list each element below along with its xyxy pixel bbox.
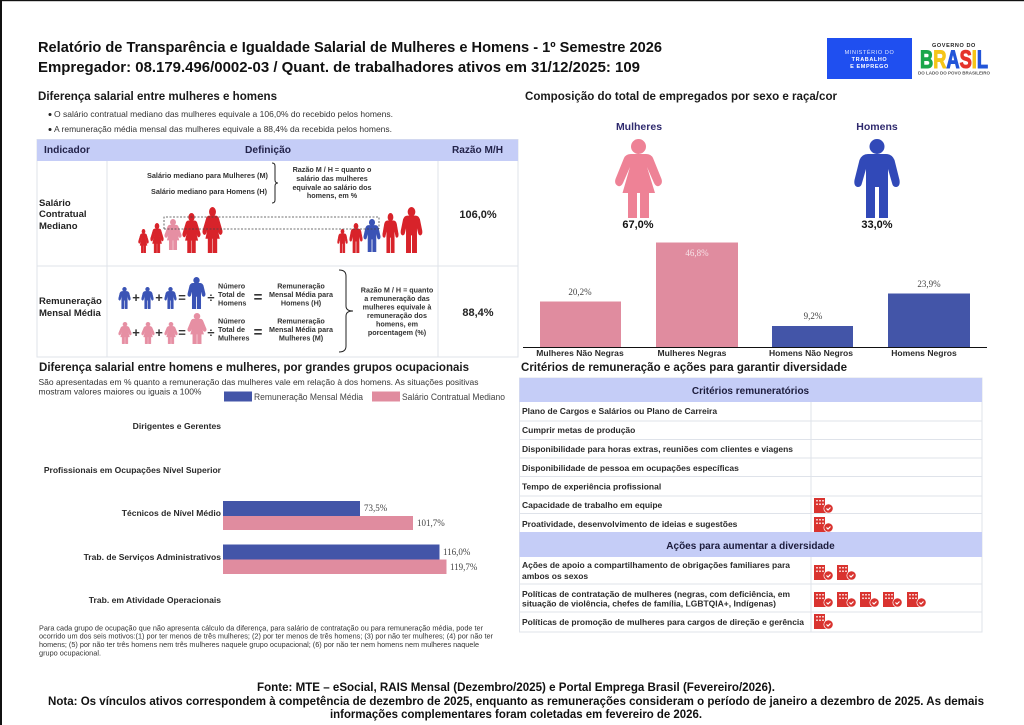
criteria list: Disponibilidade para horas extras, reuniões com clientes e viagens [522, 444, 793, 454]
formula: homens: = [178, 290, 186, 305]
formula: mulheres: = [178, 325, 186, 340]
icon: mulheres 67,0%: 67,0% [622, 219, 654, 231]
formula: homens: Remuneração [277, 282, 325, 290]
bar chart: grupos ocupacionais: 101,7% [417, 518, 445, 528]
bar chart: grupos ocupacionais: Trab. em Atividade Operacionais [89, 595, 221, 605]
legend: Salário Contratual Mediano [402, 392, 505, 402]
criteria list: Proatividade, desenvolvimento de ideias e sugestões [522, 519, 738, 529]
text: descrição do gráfico: São apresentadas em % quanto a remuneração das mulheres vale em relação à dos homens. As situações positivas [38, 377, 478, 387]
table header: Definição [245, 144, 291, 156]
bar chart: composição por sexo e raça: Homens Negros [891, 348, 957, 358]
logo: Ministério do Trabalho e Emprego: MINISTÉRIO DO [845, 49, 894, 56]
title: Empregador: 08.179.496/0002-03 / Quant. de trabalhadores ativos em 31/12/2025: 109 [38, 60, 640, 76]
row label: salário contratual mediano: Salário [39, 198, 71, 209]
icons: mulheres ordenadas por salário [138, 208, 222, 253]
heading: composição: Composição do total de empregados por sexo e raça/cor [525, 90, 837, 103]
formula: homens: Homens (H) [281, 298, 322, 308]
formula: mulheres: = [254, 324, 263, 341]
panel: critérios e ações [520, 378, 982, 632]
heading: diferença salarial: Diferença salarial entre mulheres e homens [38, 90, 277, 103]
row definition: salário mediano: salário das mulheres [296, 174, 368, 183]
icon: homens 33,0%: Homens [856, 121, 898, 133]
logo: Ministério do Trabalho e Emprego: E EMPREGO [850, 64, 889, 70]
bar chart: grupos ocupacionais: Trab. de Serviços Administrativos [84, 552, 221, 562]
title: Relatório de Transparência e Igualdade Salarial de Mulheres e Homens - 1º Semestre 2026 [38, 40, 662, 56]
row label: remuneração mensal média [39, 296, 102, 319]
brace and explanation: remuneração: Razão M / H = quanto [361, 286, 434, 294]
actions list [522, 560, 804, 627]
bullet list: resumo [48, 109, 393, 134]
bar chart: grupos ocupacionais: Profissionais em Ocupações Nível Superior [44, 465, 222, 475]
formula: mulheres: Remuneração [277, 316, 325, 326]
icons: ações adotadas [814, 565, 926, 630]
row definition: salário mediano: Salário mediano para Homens (H) [151, 187, 268, 196]
brace and explanation: remuneração: a remuneração das [364, 294, 430, 303]
actions list: Políticas de promoção de mulheres para cargos de direção e gerência [522, 617, 804, 627]
row definition: salário mediano: equivale ao salário dos [292, 183, 372, 192]
table header [44, 144, 503, 156]
bar chart: composição por sexo e raça: 46,8% [685, 248, 709, 258]
actions list: Ações de apoio a compartilhamento de obrigações familiares para [522, 560, 790, 570]
bar chart: grupos ocupacionais: 119,7% [450, 562, 478, 572]
table header: ações [520, 532, 982, 557]
formula: homens [119, 277, 334, 309]
logo: Governo do Brasil: DO LADO DO POVO BRASILEIRO [918, 70, 990, 76]
row definition: salário mediano [147, 163, 372, 203]
formula: homens: Homens [218, 298, 246, 308]
formula: mulheres: Número [218, 316, 246, 326]
table header: critérios remuneratórios: Critérios remuneratórios [692, 386, 810, 397]
text: descrição do gráfico: mostram valores maiores ou iguais a 100% [38, 386, 202, 396]
logo: Ministério do Trabalho e Emprego: TRABALHO [852, 57, 887, 63]
bar chart: composição por sexo e raça: 9,2% [804, 311, 823, 321]
formula: homens: = [254, 289, 263, 306]
icons: homens ordenados por salário [338, 208, 422, 253]
heading: critérios: Critérios de remuneração e ações para garantir diversidade [521, 361, 848, 374]
row definition: salário mediano: homens, em % [307, 191, 358, 200]
criteria list: Disponibilidade de pessoa em ocupações específicas [522, 463, 739, 473]
logo: Ministério do Trabalho e Emprego [827, 38, 912, 79]
actions list: Políticas de contratação de mulheres (negras, com deficiência, em [522, 589, 790, 599]
bar chart: composição por sexo e raça [523, 242, 987, 358]
icon: mulheres 67,0% [615, 121, 662, 231]
title [38, 40, 662, 76]
formula: mulheres: Mulheres [218, 334, 250, 342]
text: nota de rodapé do gráfico: grupo ocupacional. [39, 650, 101, 658]
bullet list: resumo: O salário contratual mediano das mulheres equivale a 106,0% do recebido pelos homens. [54, 109, 393, 119]
bar chart: composição por sexo e raça: Homens Não Negros [769, 348, 853, 358]
table header: ações: Ações para aumentar a diversidade [666, 541, 835, 552]
bar chart: grupos ocupacionais: Dirigentes e Gerentes [133, 421, 221, 431]
value: salário contratual mediano: 106,0% [459, 209, 497, 221]
criteria list: Plano de Cargos e Salários ou Plano de Carreira [522, 406, 717, 416]
logo: Governo do Brasil: GOVERNO DO [932, 43, 976, 49]
bar chart: composição por sexo e raça: 23,9% [917, 279, 941, 289]
formula: mulheres: ÷ [207, 325, 215, 340]
table header: Razão M/H [452, 144, 503, 156]
footer: fonte e nota: Fonte: MTE – eSocial, RAIS Mensal (Dezembro/2025) e Portal Emprega Brasil (Fevereiro/2026). [257, 680, 775, 694]
legend [224, 392, 505, 402]
row definition: salário mediano: Salário mediano para Mulheres (M) [147, 171, 269, 180]
criteria list: Cumprir metas de produção [522, 425, 635, 435]
row label: remuneração mensal média: Mensal Média [39, 308, 101, 319]
table header: critérios remuneratórios [520, 378, 982, 402]
bar chart: grupos ocupacionais: 73,5% [364, 503, 388, 513]
text: nota de rodapé do gráfico: Para cada grupo de ocupação que não apresenta cálculo da diferença, para salário de contratação ou para remuneração média, pode ter [39, 626, 484, 632]
formula: mulheres [119, 313, 334, 344]
formula: homens: + [155, 290, 163, 305]
brace and explanation: remuneração: porcentagem (%) [368, 328, 427, 337]
text: descrição do gráfico [38, 377, 478, 396]
formula: homens: ÷ [207, 290, 215, 305]
criteria list: Capacidade de trabalho em equipe [522, 500, 663, 510]
formula: mulheres: + [132, 325, 140, 340]
footer: fonte e nota [48, 680, 984, 721]
text: nota de rodapé do gráfico [39, 626, 494, 658]
brace and explanation: remuneração: remuneração dos [367, 311, 427, 320]
formula: mulheres: Total de [218, 325, 245, 334]
bar chart: composição por sexo e raça: Mulheres Negras [658, 348, 727, 358]
icon: homens 33,0%: 33,0% [861, 219, 893, 231]
formula: mulheres: Mensal Média para [269, 325, 334, 334]
bar chart: grupos ocupacionais: Técnicos de Nível Médio [122, 508, 221, 518]
text: nota de rodapé do gráfico: homens; (5) por não ter três homens nem três mulheres naquele grupo ocupacional; (6) por não ter nem homens nem mulheres naquele [39, 642, 479, 649]
criteria list [522, 406, 793, 529]
bullet list: resumo: A remuneração média mensal das mulheres equivale a 88,4% da recebida pelos homens. [54, 124, 392, 134]
row label: salário contratual mediano: Mediano [39, 221, 78, 232]
formula: homens: + [132, 290, 140, 305]
actions list: ambos os sexos [522, 571, 588, 581]
formula: homens: Número [218, 282, 246, 290]
formula: homens: Total de [218, 290, 245, 299]
icons: critérios adotados [814, 498, 834, 532]
row label: salário contratual mediano [39, 198, 86, 232]
row label: salário contratual mediano: Contratual [39, 209, 86, 220]
brace and explanation: remuneração: homens, em [376, 320, 418, 328]
criteria list: Tempo de experiência profissional [522, 482, 661, 492]
row definition: salário mediano: Razão M / H = quanto o [293, 165, 372, 174]
table header: Indicador [44, 144, 90, 156]
formula: mulheres: Mulheres (M) [279, 334, 324, 342]
panel: tabela de indicadores [37, 140, 518, 357]
bar chart: grupos ocupacionais [44, 421, 478, 605]
brace and explanation: remuneração [339, 270, 434, 352]
actions list: situação de violência, chefes de família, LGBTQIA+, Indígenas) [522, 598, 776, 608]
bar chart: composição por sexo e raça: 20,2% [568, 287, 592, 297]
footer: fonte e nota: Nota: Os vínculos ativos correspondem à competência de dezembro de 2025, enquanto as remunerações consideram o período de janeiro a dezembro de 2025. As demais [48, 694, 984, 708]
row label: remuneração mensal média: Remuneração [39, 296, 102, 307]
legend: Remuneração Mensal Média [254, 392, 363, 402]
text: nota de rodapé do gráfico: ocorrido um dos seis motivos:(1) por ter menos de três mulheres; (2) por ter menos de três homens; (3) por não ter mulheres; (4) por não ter [39, 634, 494, 640]
bar chart: composição por sexo e raça: Mulheres Não Negras [536, 348, 624, 358]
formula: mulheres: + [155, 325, 163, 340]
heading: diferença por grupos ocupacionais: Diferença salarial entre homens e mulheres, por grandes grupos ocupacionais [39, 361, 469, 374]
formula: homens: Mensal Média para [269, 290, 334, 299]
logo: Governo do Brasil: BRASIL [920, 46, 988, 74]
bar chart: grupos ocupacionais: 116,0% [443, 547, 471, 557]
value: remuneração mensal média: 88,4% [462, 307, 494, 319]
icon: homens 33,0% [854, 121, 900, 231]
footer: fonte e nota: informações complementares foram coletadas em fevereiro de 2026. [330, 707, 702, 721]
icon: mulheres 67,0%: Mulheres [616, 121, 662, 133]
brace and explanation: remuneração: mulheres equivale à [363, 302, 432, 312]
